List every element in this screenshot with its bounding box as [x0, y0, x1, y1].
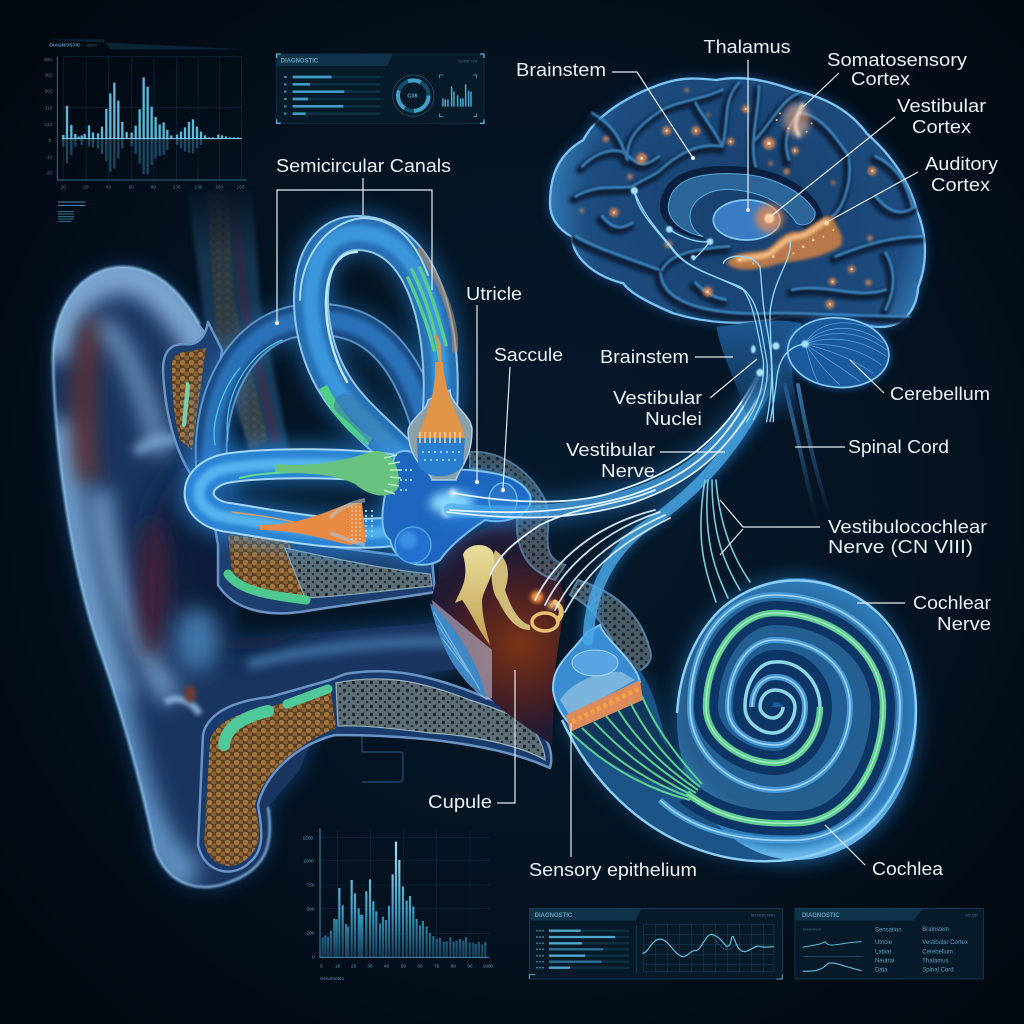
label text: Cerebellum: [890, 384, 990, 404]
label text: Brainstem: [516, 60, 606, 80]
HUD chart: top-left diagnostic waveform: 160: [215, 185, 223, 190]
HUD chart: top-left diagnostic waveform: 300: [45, 72, 53, 77]
temporal bone column: [190, 194, 290, 450]
HUD chart: top-left diagnostic waveform: -10: [45, 155, 52, 160]
sensory epithelium: [553, 625, 702, 800]
label text: Sensory epithelium: [529, 860, 697, 880]
HUD chart: top-left diagnostic waveform: 130: [173, 185, 181, 190]
label text: Somatosensory: [827, 50, 967, 70]
label text: Spinal Cord: [848, 437, 949, 457]
label text: Nuclei: [645, 409, 702, 429]
brainstem: [717, 320, 803, 422]
middle ear cavity: [430, 505, 565, 745]
label text: Nerve (CN VIII): [828, 537, 973, 557]
cerebellum: [782, 311, 895, 394]
label text: Nerve: [937, 614, 991, 634]
nerve bundles: [447, 370, 828, 640]
label text: Cortex: [851, 69, 910, 89]
HUD panel: bottom structures table: DIAGNOSTIC: [802, 913, 840, 919]
HUD panel: bottom structures table: Data: [875, 968, 888, 974]
superior canal: [311, 233, 441, 455]
label text: Auditory: [925, 154, 998, 174]
auditory cortex band: [727, 216, 842, 270]
brain: [550, 78, 925, 422]
saccule and round sac: [395, 483, 517, 563]
HUD chart: bottom histogram: [303, 828, 493, 981]
fibres and nuclei: [634, 191, 805, 422]
cochlea green spiral: [687, 613, 883, 823]
HUD panel: bottom bars and line chart: DIAGNOSTIC: [535, 913, 573, 919]
HUD chart: bottom histogram: 20: [351, 963, 357, 968]
ampulla: orange horizontal: [260, 500, 372, 545]
HUD chart: bottom histogram: 50: [401, 963, 406, 968]
label text: Saccule: [494, 345, 563, 365]
label text: Cochlear: [913, 593, 991, 613]
HUD chart: top-left diagnostic waveform: 110: [45, 122, 52, 127]
HUD chart: bottom histogram: 0: [320, 963, 323, 968]
HUD panel: bottom structures table: Cerebellum: [922, 949, 953, 955]
orange sparks: [580, 88, 877, 309]
HUD panel: bottom structures table: Utricle: [875, 940, 893, 946]
HUD chart: bottom histogram: 200: [307, 931, 315, 936]
HUD panel: bottom structures table: Sensation: [875, 927, 902, 933]
cochlea: [562, 576, 919, 862]
HUD chart: bottom histogram: 80: [451, 963, 456, 968]
limbic band: [660, 166, 823, 240]
HUD panel: top diagnostic card: SUNS 710: [458, 58, 478, 63]
HUD panel: bottom bars and line chart: [529, 908, 782, 979]
label text: Cupule: [428, 792, 492, 812]
HUD chart: bottom histogram: 90: [467, 963, 473, 968]
brain folds: [573, 83, 922, 320]
HUD chart: bottom histogram: 10: [335, 963, 341, 968]
HUD chart: top-left diagnostic waveform: 600: [44, 57, 52, 62]
HUD panel: bottom structures table: Brainstem: [922, 927, 949, 933]
HUD chart: bottom histogram: 500: [307, 907, 315, 912]
label text: [276, 37, 998, 880]
lower bone with green patches: [198, 671, 551, 872]
cochlea dark channel: [687, 613, 883, 823]
HUD panel: bottom structures table: STANDARDS: [803, 928, 821, 932]
label text: Vestibulocochlear: [828, 517, 987, 537]
HUD chart: bottom histogram: Cenomotrio: [320, 976, 344, 981]
HUD chart: top-left diagnostic waveform: 80: [151, 185, 156, 190]
HUD chart: bottom histogram: 750: [307, 883, 315, 888]
label text: Thalamus: [704, 37, 790, 57]
HUD chart: top-left diagnostic waveform: INDEX: [87, 43, 98, 47]
HUD chart: top-left diagnostic waveform: [43, 39, 247, 221]
HUD chart: top-left diagnostic waveform: 130: [195, 185, 203, 190]
vestibule: [382, 451, 531, 565]
semicircular canals: [199, 218, 455, 533]
posterior canal: [211, 319, 425, 470]
HUD panel: bottom structures table: Neutral: [875, 958, 894, 964]
HUD panel: bottom bars and line chart: SD NOE WIN: [751, 913, 775, 918]
HUD panel: bottom structures table: Labial: [875, 949, 891, 955]
HUD chart: top-left diagnostic waveform: 160: [237, 185, 245, 190]
right temporal bone: [470, 452, 651, 680]
vestibule bright glow: [430, 489, 474, 517]
ampulla: green horizontal: [275, 451, 414, 496]
HUD chart: top-left diagnostic waveform: DIAGNOSTIC: [49, 43, 81, 49]
HUD chart: bottom histogram: 0: [312, 955, 315, 960]
label text: Cochlea: [872, 859, 944, 879]
HUD chart: top-left diagnostic waveform: 40: [106, 185, 112, 190]
HUD panel: top diagnostic card: C08: [407, 94, 418, 100]
ampulla: upper orange: [408, 335, 472, 480]
HUD panel: top diagnostic card: [277, 54, 484, 123]
HUD chart: bottom histogram: 60: [417, 963, 423, 968]
HUD panel: top diagnostic card: DIAGNOSTIC: [281, 58, 319, 64]
label text: Nerve: [601, 461, 655, 481]
HUD panel: bottom structures table: SD SD: [965, 913, 978, 918]
label text: Semicircular Canals: [276, 156, 451, 176]
label text: Vestibular: [566, 440, 655, 460]
label text: Vestibular: [613, 388, 702, 408]
HUD chart: bottom histogram: 1000: [303, 859, 314, 864]
HUD panel: bottom structures table: Vestibular Cortex: [922, 940, 968, 946]
outer ear: [40, 260, 480, 900]
labels: leader lines: [275, 60, 918, 865]
HUD chart: bottom histogram: 40: [384, 963, 390, 968]
eardrum: [430, 600, 492, 700]
label text: Utricle: [466, 284, 522, 304]
HUD chart: bottom histogram: 30: [367, 963, 373, 968]
HUD panel: bottom structures table: Spinal Cord: [922, 968, 954, 974]
horizontal canal: [199, 464, 405, 533]
HUD chart: bottom histogram: 70: [434, 963, 440, 968]
thalamus body: [713, 200, 780, 240]
HUD chart: bottom histogram: 1200: [303, 835, 313, 840]
HUD chart: top-left diagnostic waveform: -20: [45, 171, 52, 176]
label text: Brainstem: [600, 347, 689, 367]
HUD chart: bottom histogram: 1000: [483, 963, 493, 968]
upper bony block with green patch: [163, 322, 435, 613]
HUD chart: top-left diagnostic waveform: 500: [45, 89, 53, 94]
HUD chart: top-left diagnostic waveform: 60: [129, 185, 134, 190]
HUD panel: bottom structures table: Thalamus: [922, 958, 949, 964]
cochlea light spiral: [660, 595, 900, 840]
HUD chart: top-left diagnostic waveform: 10: [61, 185, 66, 190]
HUD chart: top-left diagnostic waveform: 310: [45, 105, 53, 110]
somatosensory glow: [776, 103, 813, 137]
HUD chart: top-left diagnostic waveform: 20: [83, 185, 89, 190]
label text: Cortex: [931, 175, 990, 195]
HUD chart: top-left diagnostic waveform: 0: [49, 138, 52, 143]
ossicles: [455, 545, 561, 645]
label text: Cortex: [912, 117, 971, 137]
label text: Vestibular: [897, 96, 986, 116]
HUD panel: bottom structures table: [795, 908, 983, 979]
